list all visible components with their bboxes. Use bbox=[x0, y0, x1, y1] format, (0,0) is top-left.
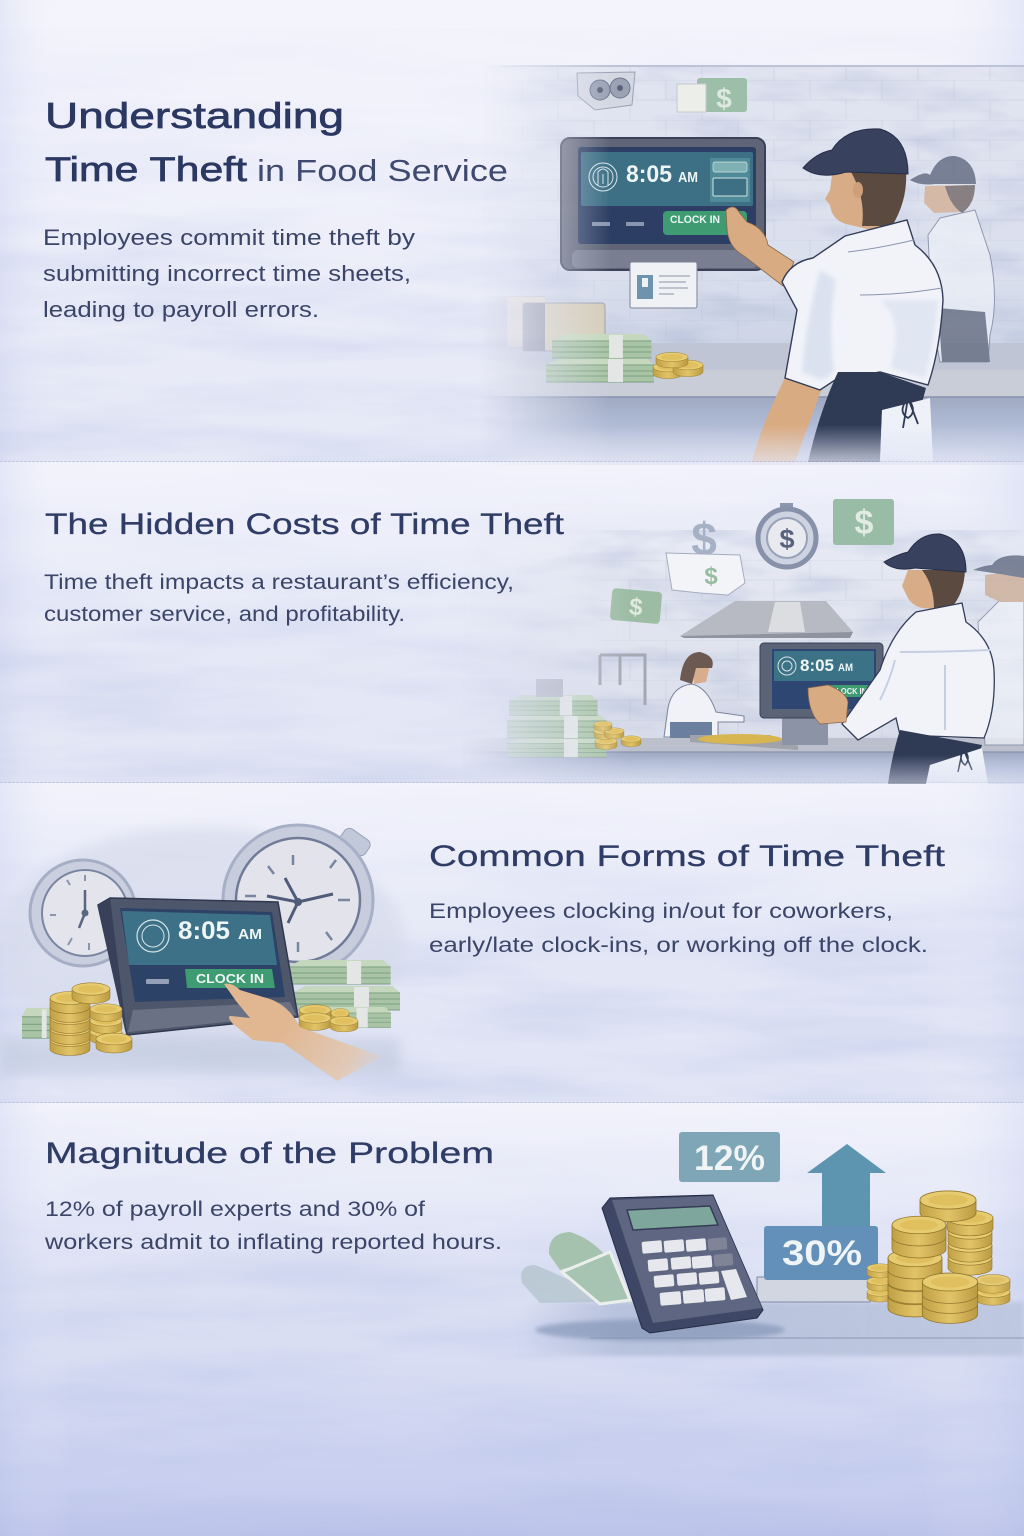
heading: understanding time theft: Time Theft bbox=[45, 151, 248, 189]
hanging arm bbox=[752, 378, 822, 462]
raised arm and pointing hand bbox=[726, 207, 794, 286]
icon: faded dollar sign: $ bbox=[691, 513, 717, 565]
icon: right clock bbox=[223, 825, 373, 975]
head bbox=[902, 570, 934, 608]
terminal bbox=[760, 643, 883, 745]
badge: 30 percent: 30% bbox=[782, 1234, 862, 1273]
panel: understanding time theft bbox=[43, 65, 1024, 465]
badge: 12 percent bbox=[679, 1132, 780, 1182]
table surface bbox=[520, 1302, 1024, 1356]
shirt bbox=[842, 603, 994, 740]
apron bbox=[808, 372, 926, 462]
cap bbox=[803, 129, 908, 175]
calculator bbox=[602, 1195, 763, 1333]
icon: torn paper note bbox=[666, 553, 745, 595]
wall clock-in terminal: CLOCK IN bbox=[670, 214, 720, 226]
heading: magnitude: Magnitude of the Problem bbox=[45, 1137, 494, 1170]
cap bbox=[884, 534, 966, 572]
icon: small green note: $ bbox=[628, 593, 644, 622]
badge: 30 percent bbox=[757, 1226, 878, 1302]
icon: dollar note: $ bbox=[716, 83, 732, 114]
apron bbox=[888, 730, 982, 784]
icon: security camera bbox=[577, 72, 635, 110]
head bbox=[825, 172, 880, 230]
clock-in device: 8:05 bbox=[178, 917, 230, 945]
illustration: hand pressing clock in with clocks and money bbox=[0, 825, 405, 1081]
text block: statistics bbox=[44, 1198, 502, 1254]
left coin stacks bbox=[50, 983, 132, 1056]
text block: statistics: workers admit to inflating reported hours. bbox=[44, 1231, 502, 1254]
cash behind calculator bbox=[521, 1232, 630, 1304]
clock-in device bbox=[98, 898, 298, 1035]
heading: common forms: Time Theft bbox=[759, 840, 946, 873]
panel: magnitude bbox=[44, 1132, 1024, 1356]
panel: hidden costs bbox=[44, 499, 1024, 784]
terminal: 8:05 bbox=[800, 656, 834, 675]
terminal: AM bbox=[838, 662, 853, 674]
text block: definition: Employees commit time theft by bbox=[43, 225, 415, 250]
terminal: CLOCK IN bbox=[831, 687, 867, 696]
wall clock-in terminal: AM bbox=[678, 169, 698, 186]
wall clock-in terminal bbox=[561, 138, 765, 270]
misty backdrop bbox=[0, 827, 405, 1063]
icon: green note: $ bbox=[855, 504, 874, 542]
coin stacks bbox=[594, 721, 641, 750]
badge: 12 percent: 12% bbox=[694, 1139, 765, 1178]
text block: impact: Time theft impacts a restaurant’s efficiency, bbox=[44, 571, 514, 594]
coin stacks bbox=[653, 352, 703, 379]
cash bundles behind device bbox=[22, 960, 400, 1038]
text block: statistics: 12% of payroll experts and 30% of bbox=[45, 1198, 425, 1221]
shelf bbox=[600, 655, 645, 705]
clock-in device: CLOCK IN bbox=[196, 971, 264, 986]
fingerprint icon bbox=[589, 163, 617, 191]
background employee bbox=[910, 156, 994, 362]
hand bbox=[808, 685, 848, 724]
background cook bbox=[664, 652, 744, 738]
shirt bbox=[782, 220, 943, 390]
right coin stacks bbox=[299, 1005, 358, 1032]
icon: stopwatch with dollar bbox=[758, 503, 816, 567]
text block: definition: leading to payroll errors. bbox=[43, 297, 319, 322]
icon: left clock bbox=[30, 860, 136, 966]
storage boxes bbox=[512, 296, 606, 352]
main employee bbox=[808, 534, 994, 784]
text block: forms bbox=[429, 900, 928, 957]
text block: definition: submitting incorrect time sheets, bbox=[43, 261, 411, 286]
ID badge bbox=[630, 262, 697, 308]
illustration: kitchen with terminal and floating money bbox=[440, 499, 1024, 784]
heading: understanding time theft bbox=[45, 95, 508, 189]
heading: common forms: Common Forms of bbox=[429, 840, 750, 873]
text block: impact bbox=[44, 571, 514, 626]
wall clock-in terminal: 8:05 bbox=[626, 161, 672, 188]
kitchen hood bbox=[680, 601, 853, 638]
text block: impact: customer service, and profitability. bbox=[44, 603, 405, 626]
cash bundles bbox=[546, 334, 654, 382]
illustration: employee clocking in at wall terminal bbox=[440, 65, 1024, 465]
text block: definition bbox=[43, 225, 415, 322]
hand pressing button bbox=[224, 984, 383, 1081]
icon: green note bbox=[833, 499, 894, 545]
coin stacks bbox=[867, 1191, 1010, 1323]
background employee bbox=[973, 555, 1024, 745]
heading: understanding time theft: Understanding bbox=[45, 95, 344, 136]
tray of coins bbox=[690, 734, 798, 750]
icon: dollar note bbox=[677, 78, 747, 114]
icon: torn paper note: $ bbox=[704, 563, 718, 590]
cash bundles bbox=[507, 679, 606, 757]
panel: common forms bbox=[0, 825, 946, 1081]
heading: common forms bbox=[429, 840, 946, 873]
icon: stopwatch with dollar: $ bbox=[779, 524, 795, 554]
text block: forms: Employees clocking in/out for coworkers, bbox=[429, 900, 893, 923]
illustration: calculator, statistics and coins bbox=[520, 1132, 1024, 1356]
heading: hidden costs: The Hidden Costs of Time Theft bbox=[45, 508, 565, 541]
arrow: upward trend bbox=[807, 1144, 886, 1228]
icon: small green note bbox=[610, 588, 662, 624]
text block: forms: early/late clock-ins, or working off the clock. bbox=[429, 934, 928, 957]
clock-in device: AM bbox=[238, 926, 262, 943]
counter bbox=[440, 738, 1024, 784]
counter bbox=[440, 343, 1024, 465]
main employee bbox=[726, 129, 943, 462]
calculator keys bbox=[642, 1237, 747, 1306]
heading: understanding time theft: in Food Service bbox=[257, 153, 508, 188]
